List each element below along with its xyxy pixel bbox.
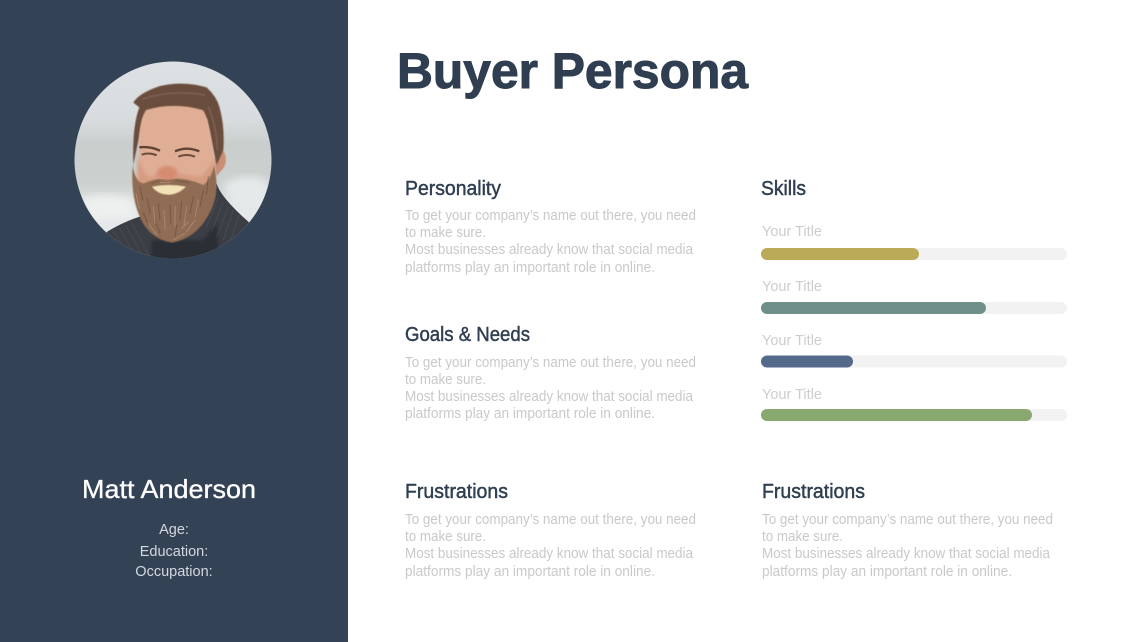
panel: skills: [761, 178, 1067, 421]
skill bar 4: Your Title: [762, 387, 822, 403]
sweater: [106, 184, 249, 258]
person details: Education:: [140, 544, 208, 560]
text block: goals and needs: Goals & Needs: [405, 324, 530, 346]
text block: personality: To get your company’s name out there, you need: [405, 208, 696, 224]
panel: profile sidebar: [0, 0, 348, 642]
skill bar 1: Your Title: [762, 224, 822, 240]
text block: personality: to make sure.: [405, 225, 486, 241]
text block: frustrations left: Most businesses already know that social media: [405, 546, 694, 562]
skill bar 3: Your Title: [762, 333, 822, 349]
beard: [132, 165, 216, 243]
text block: frustrations left: [405, 481, 696, 580]
face: [138, 105, 215, 179]
text block: frustrations right: to make sure.: [762, 529, 843, 545]
text block: frustrations right: platforms play an important role in online.: [762, 564, 1012, 580]
hair: [133, 84, 224, 165]
skill bar 2: [761, 279, 1067, 314]
text block: goals and needs: platforms play an important role in online.: [405, 406, 655, 422]
text block: personality: Personality: [405, 178, 501, 200]
text block: frustrations left: platforms play an important role in online.: [405, 564, 655, 580]
title: Buyer Persona: [397, 43, 749, 99]
smile: [152, 185, 186, 195]
person details: Occupation:: [135, 564, 213, 580]
text block: personality: platforms play an important role in online.: [405, 260, 655, 276]
person details: [135, 522, 213, 580]
skill bar 1: [761, 224, 1067, 260]
nose: [157, 166, 177, 179]
text block: frustrations right: To get your company’s name out there, you need: [762, 512, 1053, 528]
text block: frustrations left: To get your company’s name out there, you need: [405, 512, 696, 528]
text block: personality: [405, 178, 696, 276]
text block: frustrations right: [762, 481, 1053, 580]
skill bar 2: Your Title: [762, 279, 822, 295]
brows: [139, 147, 160, 151]
portrait photo: [74, 61, 272, 270]
text block: frustrations right: Frustrations: [762, 481, 865, 503]
text block: goals and needs: to make sure.: [405, 372, 486, 388]
eyes: [142, 153, 157, 155]
person name: Matt Anderson: [82, 474, 256, 504]
person details: Age:: [159, 522, 189, 538]
skill bar 3: [761, 333, 1067, 368]
skills heading: Skills: [761, 178, 806, 200]
text block: frustrations left: Frustrations: [405, 481, 508, 503]
skill bar 4: [761, 387, 1067, 421]
text block: goals and needs: To get your company’s name out there, you need: [405, 355, 696, 371]
text block: frustrations right: Most businesses already know that social media: [762, 546, 1051, 562]
text block: frustrations left: to make sure.: [405, 529, 486, 545]
text block: goals and needs: Most businesses already know that social media: [405, 389, 694, 405]
text block: personality: Most businesses already know that social media: [405, 242, 694, 258]
neck and ear: [214, 151, 226, 176]
text block: goals and needs: [405, 324, 696, 422]
